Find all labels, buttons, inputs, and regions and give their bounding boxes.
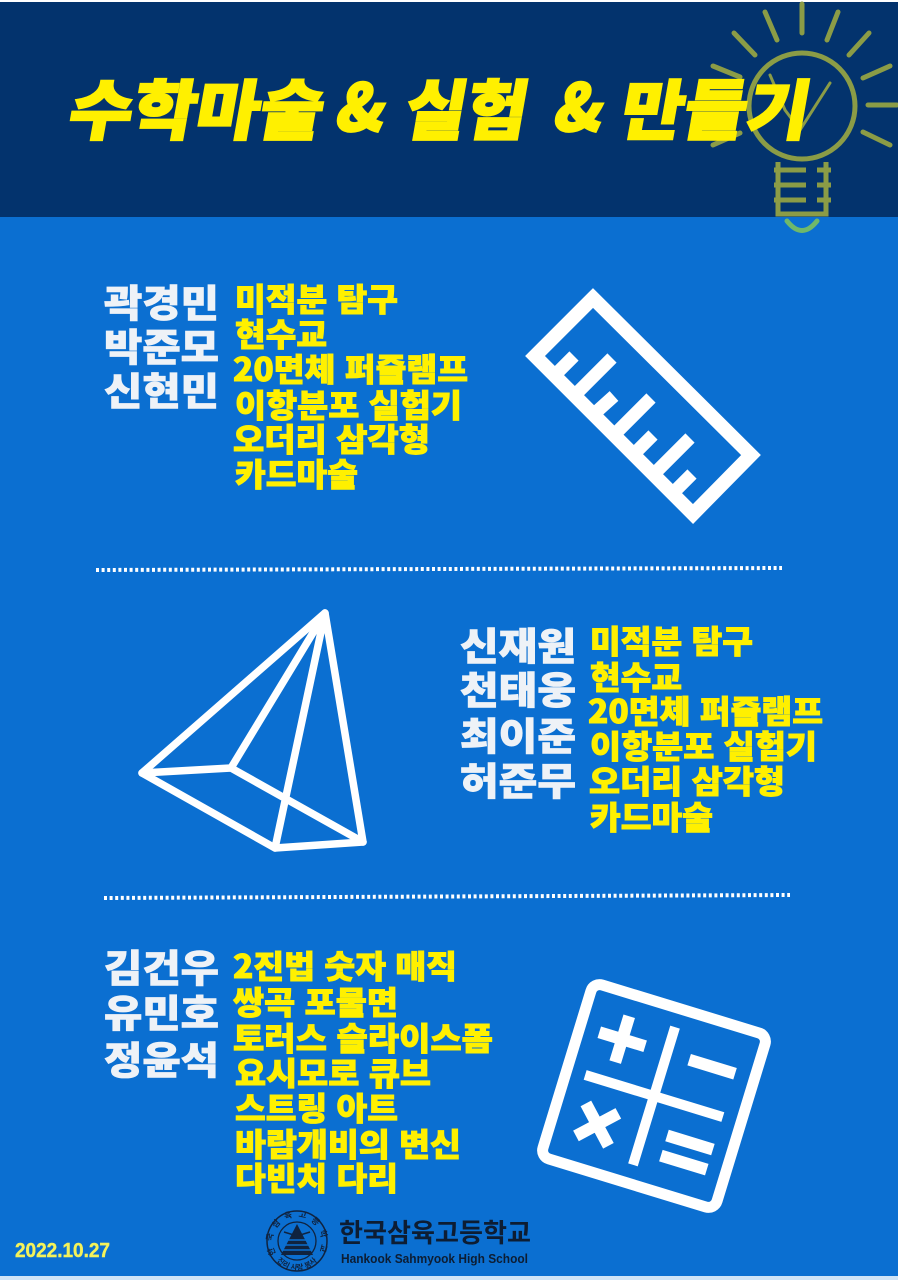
school seal: 진리 사랑 봉사	[277, 1257, 317, 1270]
project list: group 2: 카드마술	[590, 793, 713, 839]
title: &	[549, 56, 613, 150]
names: group 3: 정윤석	[104, 1030, 219, 1085]
project list: group 1: 20면체 퍼즐램프	[233, 345, 468, 391]
project list: group 1: 현수교	[235, 310, 327, 356]
project list: group 2: 현수교	[590, 653, 682, 699]
names: group 1: 신현민	[104, 361, 219, 416]
project list: group 2: 20면체 퍼즐램프	[588, 687, 823, 733]
names: group 2	[460, 616, 576, 806]
icon: calculator	[540, 982, 768, 1210]
names: group 1: 박준모	[104, 317, 219, 372]
names: group 2: 신재원	[460, 616, 576, 671]
school name	[339, 1218, 531, 1266]
project list: group 1	[233, 275, 468, 496]
project list: group 1: 미적분 탐구	[235, 275, 398, 321]
names: group 3: 유민호	[104, 983, 219, 1038]
title	[63, 56, 819, 153]
project list: group 3: 2진법 숫자 매직	[233, 942, 457, 988]
title: 만들기	[615, 59, 819, 153]
school name: 한국삼육고등학교	[339, 1218, 531, 1248]
icon: ruler	[535, 298, 751, 514]
names: group 1	[104, 273, 219, 416]
project list: group 1: 오더리 삼각형	[233, 415, 430, 461]
title: 실험	[399, 59, 537, 153]
project list: group 2	[588, 617, 823, 839]
project list: group 3: 다빈치 다리	[235, 1154, 398, 1200]
project list: group 3: 요시모로 큐브	[235, 1049, 431, 1095]
project list: group 3: 바람개비의 변신	[235, 1120, 461, 1166]
date: 2022.10.27	[15, 1240, 110, 1262]
project list: group 2: 이항분포 실험기	[590, 722, 817, 768]
names: group 2: 허준무	[460, 751, 576, 806]
names: group 2: 최이준	[460, 706, 576, 761]
icon: light bulb	[713, 4, 897, 230]
icon: pyramid	[142, 613, 363, 848]
divider	[104, 895, 790, 898]
names: group 1: 곽경민	[104, 273, 219, 328]
title: &	[331, 56, 395, 150]
school name: Hankook Sahmyook High School	[341, 1252, 528, 1266]
title: 수학마술	[63, 59, 333, 153]
project list: group 2: 미적분 탐구	[590, 617, 753, 663]
header band	[0, 2, 898, 217]
project list: group 3: 쌍곡 포물면	[233, 978, 398, 1024]
names: group 2: 천태웅	[460, 660, 576, 715]
names: group 3	[104, 938, 219, 1085]
project list: group 3: 토러스 슬라이스폼	[233, 1014, 493, 1060]
project list: group 3	[233, 942, 493, 1200]
school seal: 한국삼육고등학교	[266, 1210, 328, 1256]
project list: group 3: 스트링 아트	[235, 1084, 398, 1130]
project list: group 2: 오더리 삼각형	[589, 757, 785, 803]
project list: group 1: 이항분포 실험기	[235, 381, 462, 427]
names: group 3: 김건우	[104, 938, 219, 993]
divider	[96, 568, 782, 570]
project list: group 1: 카드마술	[235, 450, 358, 496]
